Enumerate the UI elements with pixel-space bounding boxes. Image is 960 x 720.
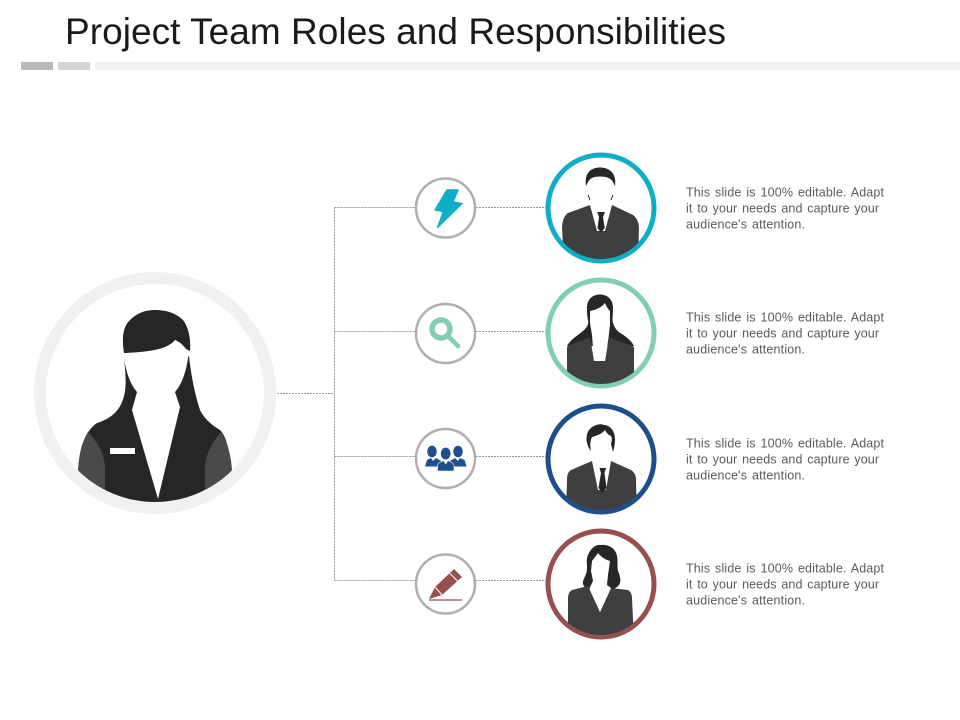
text block 1: audience's attention. xyxy=(686,218,805,232)
title: Project Team Roles and Responsibilities xyxy=(65,11,726,52)
text block 3 xyxy=(686,436,885,482)
person 4: woman in maroon ring xyxy=(548,531,654,640)
text block 2: This slide is 100% editable. Adapt xyxy=(686,310,885,324)
text block 1: This slide is 100% editable. Adapt xyxy=(686,186,885,200)
icon: magnifier xyxy=(416,304,475,363)
icon: lightning bolt xyxy=(416,178,475,238)
text block 4: audience's attention. xyxy=(686,594,805,608)
header divider bars xyxy=(21,62,960,70)
connector lines xyxy=(277,208,546,580)
main person: team leader avatar xyxy=(40,278,270,510)
person 2: woman in green ring xyxy=(548,280,654,390)
text block 3: it to your needs and capture your xyxy=(686,452,879,466)
text block 3: This slide is 100% editable. Adapt xyxy=(686,436,885,450)
text block 3: audience's attention. xyxy=(686,468,805,482)
text block 2: audience's attention. xyxy=(686,342,805,356)
text block 4 xyxy=(686,562,885,608)
person 1: man in teal ring xyxy=(548,155,654,262)
text block 2 xyxy=(686,310,885,356)
text block 4: it to your needs and capture your xyxy=(686,578,879,592)
text block 1: it to your needs and capture your xyxy=(686,202,879,216)
text block 2: it to your needs and capture your xyxy=(686,326,879,340)
icon: pencil xyxy=(416,554,475,614)
icon: team of people xyxy=(416,429,475,488)
text block 1 xyxy=(686,186,885,232)
person 3: man in navy ring xyxy=(548,406,654,514)
text block 4: This slide is 100% editable. Adapt xyxy=(686,562,885,576)
